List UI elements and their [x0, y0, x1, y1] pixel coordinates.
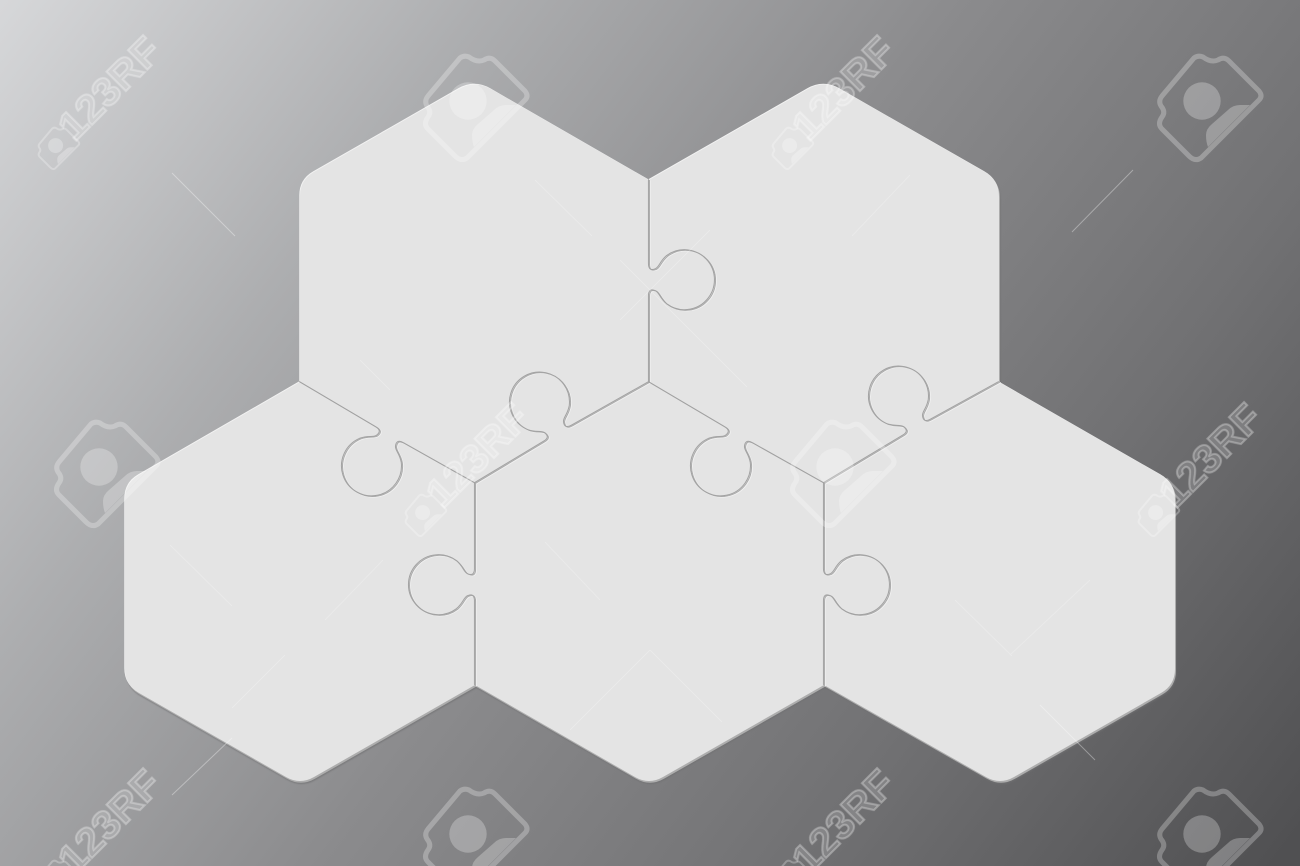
faint diagonal watermark lines on panels — [170, 175, 1090, 730]
faint diagonal watermark lines on background — [172, 170, 1133, 795]
hexagon puzzle cluster — [124, 84, 1176, 784]
watermark: small egg icons — [39, 128, 1179, 866]
seams between the five hexagon pieces with puzzle tabs — [299, 180, 1000, 686]
watermark text: 123RF — [1151, 396, 1271, 516]
puzzle base: five joined hexagons — [125, 84, 1175, 781]
watermark text: 123RF — [784, 29, 904, 149]
watermark text: 123RF — [418, 396, 538, 516]
drop shadow of cluster — [126, 88, 1176, 784]
bevel edge of cluster — [126, 86, 1176, 783]
light rim of cluster — [124, 84, 1174, 780]
watermark text: 123RF — [50, 29, 170, 149]
